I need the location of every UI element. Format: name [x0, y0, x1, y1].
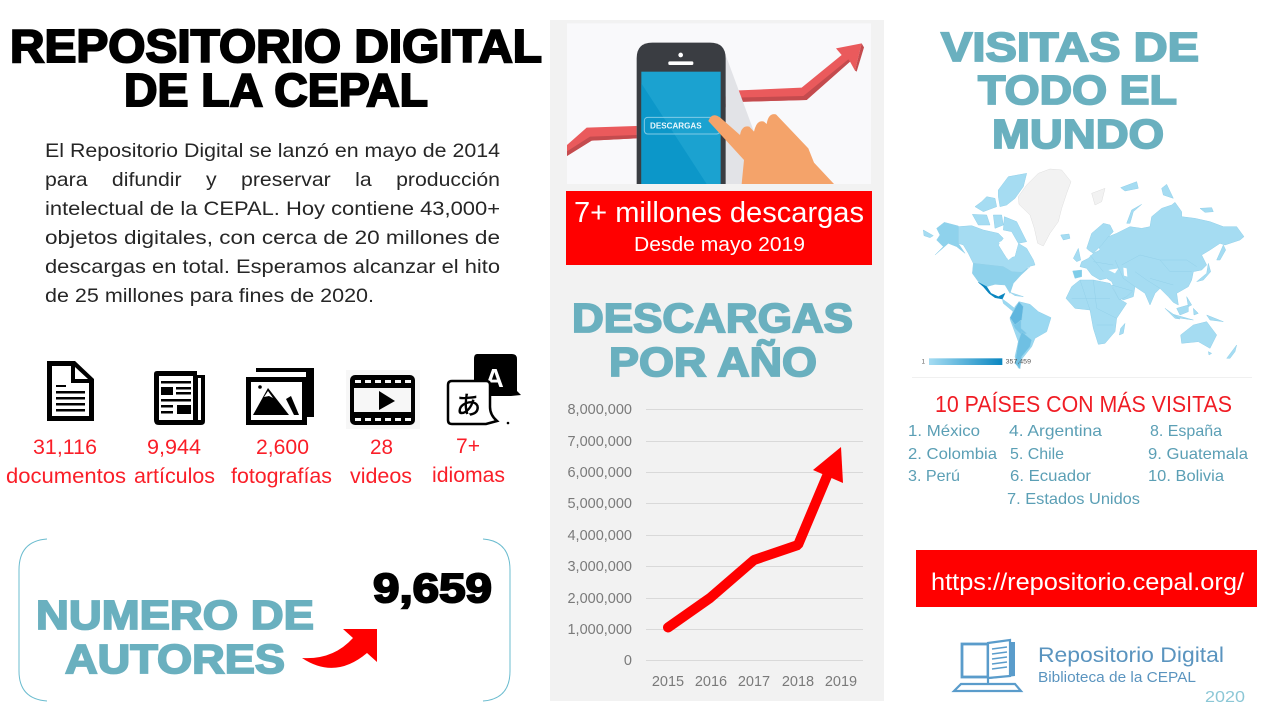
phone shadow	[726, 55, 773, 184]
old world	[1066, 182, 1244, 358]
argentina	[1015, 332, 1032, 369]
y axis labels: 4,000,000	[567, 528, 632, 544]
world map	[922, 169, 1244, 369]
y axis labels: 2,000,000	[567, 591, 632, 607]
stat: artículos: artículos	[134, 465, 215, 488]
south america	[1010, 302, 1051, 368]
icon: languages: A	[485, 363, 504, 393]
heading: descargas por año: POR AÑO	[609, 339, 817, 385]
logo	[954, 640, 1224, 691]
heading: visitas	[941, 24, 1199, 157]
stat: videos: videos	[350, 465, 412, 488]
logo: Biblioteca de la CEPAL	[1038, 669, 1196, 686]
callout: url: https://repositorio.cepal.org/	[931, 569, 1244, 596]
americas	[923, 169, 1071, 369]
heading: visitas: TODO EL	[978, 67, 1177, 113]
colombia and ecuador	[1010, 302, 1023, 325]
intro paragraph: descargas en total. Esperamos alcanzar el hito	[45, 256, 500, 278]
stat: idiomas	[432, 435, 505, 487]
year: 2020	[1205, 689, 1245, 706]
hudson bay	[999, 237, 1018, 260]
list: top countries: 6. Ecuador	[1010, 468, 1092, 485]
australia	[1181, 322, 1217, 348]
callout: url	[916, 550, 1257, 607]
stat: videos	[350, 436, 412, 488]
map legend	[922, 358, 1032, 366]
intro paragraph: para difundir y preservar la producción	[45, 169, 500, 191]
islands	[1165, 297, 1223, 355]
x axis labels: 2018	[782, 674, 814, 690]
x axis labels	[652, 674, 857, 690]
trend arrow	[668, 447, 843, 628]
y axis labels: 7,000,000	[567, 434, 632, 450]
icon: document	[47, 361, 94, 421]
authors heading: NUMERO DE	[36, 592, 314, 638]
callout: downloads	[566, 191, 872, 265]
stat: artículos: 9,944	[147, 436, 201, 459]
stat: fotografías: fotografías	[231, 465, 332, 488]
list: top countries: 9. Guatemala	[1148, 446, 1248, 463]
icon: video	[346, 370, 420, 429]
stat: documentos: documentos	[6, 465, 126, 488]
peru	[1010, 318, 1027, 335]
x axis labels: 2017	[738, 674, 770, 690]
panel: authors	[19, 539, 510, 701]
heading: visitas: VISITAS DE	[941, 24, 1199, 70]
list: top countries: 7. Estados Unidos	[1007, 491, 1140, 508]
icon: languages	[448, 354, 521, 424]
phone body	[637, 43, 726, 184]
callout: downloads: 7+ millones descargas	[574, 197, 864, 229]
x axis labels: 2016	[695, 674, 727, 690]
new zealand	[1227, 345, 1237, 358]
callout: downloads: Desde mayo 2019	[634, 234, 805, 256]
svalbard	[1092, 188, 1105, 205]
intro paragraph: intelectual de la CEPAL. Hoy contiene 43,000+	[45, 198, 500, 220]
stat: artículos	[134, 436, 215, 488]
hand	[708, 114, 834, 184]
stat: documentos	[6, 436, 126, 488]
madagascar	[1119, 323, 1125, 335]
y axis labels: 1,000,000	[567, 622, 632, 638]
stat: idiomas: idiomas	[432, 464, 505, 487]
y axis labels: 5,000,000	[567, 496, 632, 512]
x axis labels: 2015	[652, 674, 684, 690]
logo: Repositorio Digital	[1038, 644, 1224, 667]
title	[10, 20, 542, 116]
scandinavia	[1087, 223, 1113, 253]
y axis labels: 0	[624, 653, 632, 669]
inland seas	[1108, 268, 1127, 277]
eurasia	[1080, 202, 1244, 305]
list: top countries: 3. Perú	[908, 468, 960, 485]
africa	[1066, 280, 1127, 344]
icon: book on screen	[954, 640, 1021, 691]
red trend line	[567, 126, 637, 156]
x axis labels: 2019	[825, 674, 857, 690]
mexico	[978, 282, 1005, 299]
y axis labels: 6,000,000	[567, 465, 632, 481]
heading: visitas: MUNDO	[992, 111, 1164, 157]
list: top countries: 8. España	[1150, 423, 1222, 440]
spain	[1073, 270, 1082, 278]
list: top countries: 1. México	[908, 423, 980, 440]
stat: idiomas: 7+	[456, 435, 480, 458]
panel: downloads column	[550, 20, 884, 701]
image: phone downloads	[567, 23, 871, 184]
y axis labels: 3,000,000	[567, 559, 632, 575]
heading: descargas por año	[572, 295, 853, 385]
uk	[1073, 248, 1081, 262]
intro paragraph: El Repositorio Digital se lanzó en mayo de 2014	[45, 140, 500, 162]
list: top countries: 5. Chile	[1010, 446, 1064, 463]
map legend: 357,459	[1006, 360, 1032, 366]
icon: newspaper	[154, 371, 205, 425]
list: top countries: 10. Bolivia	[1148, 468, 1224, 485]
canada	[958, 226, 1035, 273]
arabia	[1112, 285, 1133, 300]
title: REPOSITORIO DIGITAL	[10, 20, 542, 72]
icon: languages: あ	[456, 392, 481, 420]
intro paragraph: de 25 millones para fines de 2020.	[45, 285, 374, 307]
heading: top countries: 10 PAÍSES CON MÁS VISITAS	[935, 391, 1232, 417]
heading: descargas por año: DESCARGAS	[572, 295, 853, 341]
greenland	[1018, 169, 1071, 246]
alaska	[935, 222, 965, 255]
authors heading	[36, 592, 314, 682]
authors number: 9,659	[373, 565, 492, 611]
country borders	[1072, 255, 1197, 325]
stat: documentos: 31,116	[33, 436, 97, 459]
stat: videos: 28	[370, 436, 393, 459]
y axis labels	[567, 402, 632, 669]
icon: photographs	[246, 368, 314, 425]
central america and caribbean	[1002, 299, 1017, 312]
stat: fotografías	[231, 436, 332, 488]
arrow: authors	[302, 629, 377, 668]
map legend: 1	[922, 360, 926, 366]
y axis labels: 8,000,000	[567, 402, 632, 418]
stat: fotografías: 2,600	[256, 436, 309, 459]
image: phone downloads: DESCARGAS	[650, 121, 702, 131]
authors heading: AUTORES	[65, 636, 285, 682]
title: DE LA CEPAL	[124, 64, 428, 116]
united states	[972, 263, 1030, 293]
intro paragraph: objetos digitales, con cerca de 20 millones de	[45, 227, 500, 249]
list: top countries	[908, 423, 1248, 508]
arctic canada	[972, 173, 1070, 243]
line chart	[567, 402, 863, 690]
list: top countries: 4. Argentina	[1009, 423, 1102, 440]
intro paragraph	[45, 140, 500, 307]
list: top countries: 2. Colombia	[908, 446, 997, 463]
